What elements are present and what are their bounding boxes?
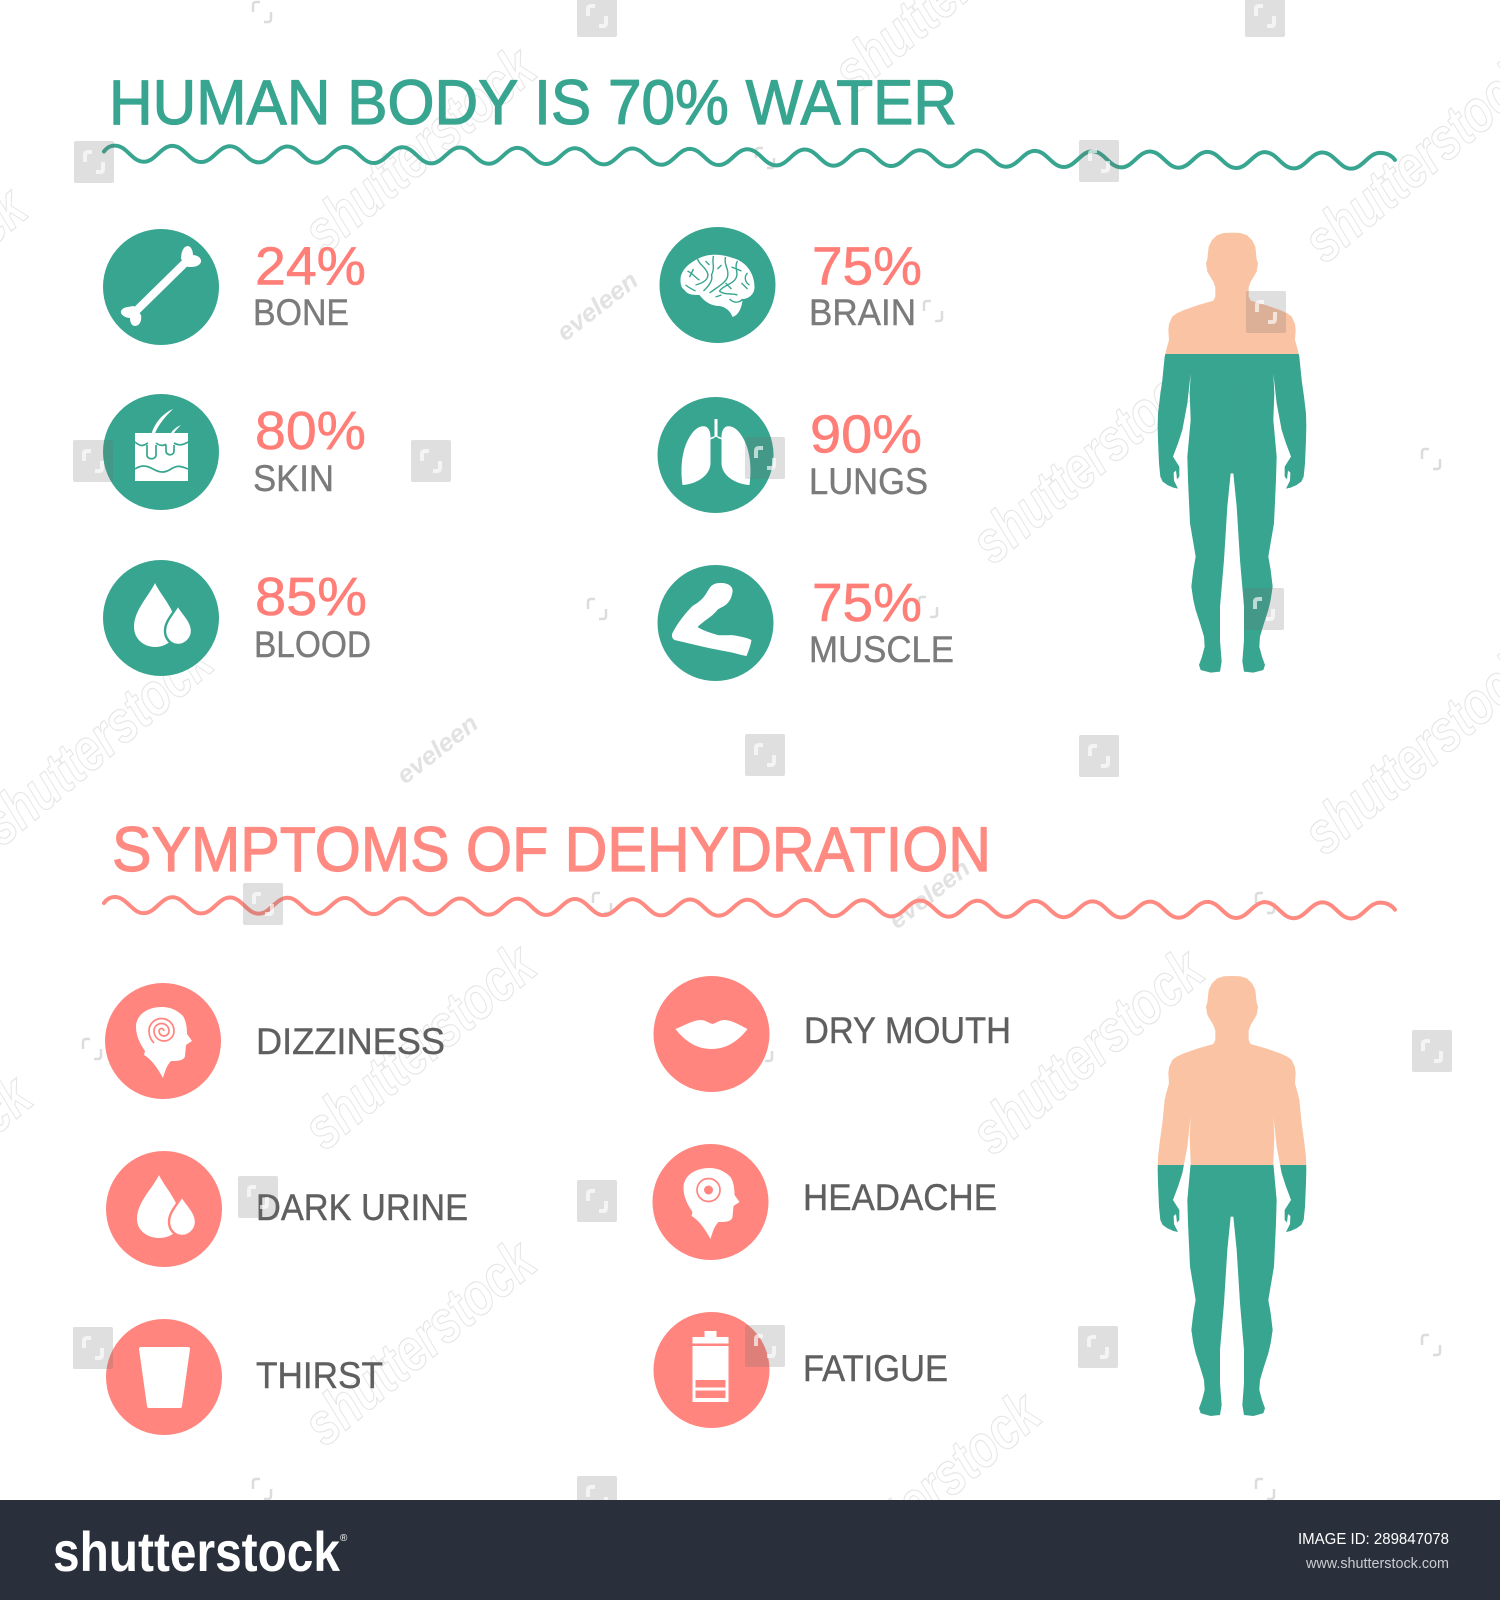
wavy divider: dehydration section: [104, 897, 1395, 919]
label: lungs: LUNGS: [809, 461, 928, 502]
icon: brain: [660, 227, 776, 343]
watermark layer: eveleen: [883, 854, 976, 935]
stat: muscle: [658, 565, 954, 681]
value: 24%: 24%: [255, 236, 366, 296]
stat: brain: [660, 227, 922, 343]
icon: head with spiral: [105, 983, 221, 1099]
footer bar: [0, 1500, 1500, 1600]
footer logo: shutterstock: [53, 1520, 341, 1583]
icon: glass: [106, 1319, 222, 1435]
stat: bone: [103, 229, 366, 345]
symptom: dry mouth: [654, 976, 1011, 1092]
title: human body is 70% water: HUMAN BODY IS 70% WATER: [109, 68, 957, 138]
symptom: dizziness: [105, 983, 445, 1099]
icon: flexed arm: [658, 565, 774, 681]
label: dry mouth: DRY MOUTH: [804, 1010, 1011, 1051]
watermark layer: shutterstock: [290, 929, 549, 1162]
label: muscle: MUSCLE: [809, 629, 954, 670]
label: bone: BONE: [253, 292, 349, 333]
stat: lungs: [658, 397, 928, 513]
value: 75%: 75%: [812, 573, 922, 633]
figure: body filled with water to 70%: [1158, 233, 1306, 673]
panel: water content by organ: [103, 227, 954, 681]
watermark layer: shutterstock: [958, 343, 1217, 576]
label: dizziness: DIZZINESS: [256, 1021, 445, 1062]
stat: skin: [103, 394, 366, 510]
wavy divider: water section: [104, 146, 1395, 169]
icon: low battery: [654, 1312, 770, 1428]
website: www.shutterstock.com: [1305, 1555, 1449, 1572]
value: 80%: 80%: [255, 401, 366, 461]
label: skin: SKIN: [253, 458, 334, 499]
label: dark urine: DARK URINE: [256, 1187, 468, 1228]
icon: skin: [103, 394, 219, 510]
watermark layer: eveleen: [391, 709, 484, 790]
panel: dehydration symptoms: [105, 976, 1011, 1435]
symptom: fatigue: [654, 1312, 948, 1428]
registered mark: ®: [340, 1533, 348, 1544]
icon: bone: [103, 229, 219, 345]
label: thirst: THIRST: [256, 1355, 383, 1396]
symptom: dark urine: [106, 1151, 468, 1267]
stat: blood: [103, 560, 371, 676]
symptom: headache: [652, 1144, 997, 1260]
icon: drops: [106, 1151, 222, 1267]
watermark layer: eveleen: [551, 266, 644, 347]
value: 75%: 75%: [812, 236, 922, 296]
label: fatigue: FATIGUE: [803, 1348, 948, 1389]
symptom: thirst: [106, 1319, 383, 1435]
icon: head with target: [652, 1144, 768, 1260]
label: blood: BLOOD: [254, 624, 371, 665]
label: headache: HEADACHE: [803, 1177, 997, 1218]
icon: blood drops: [103, 560, 219, 676]
icon: lips: [654, 976, 770, 1092]
watermark layer: shutterstock: [958, 934, 1217, 1167]
figure: dehydrated body with lower water level: [1158, 976, 1306, 1416]
value: 85%: 85%: [255, 567, 367, 627]
image id: IMAGE ID: 289847078: [1298, 1531, 1449, 1548]
label: brain: BRAIN: [809, 292, 916, 333]
value: 90%: 90%: [810, 404, 922, 464]
icon: lungs: [658, 397, 774, 513]
title: symptoms of dehydration: SYMPTOMS OF DEHYDRATION: [112, 815, 991, 885]
watermark layer: shutterstock: [290, 1225, 549, 1458]
